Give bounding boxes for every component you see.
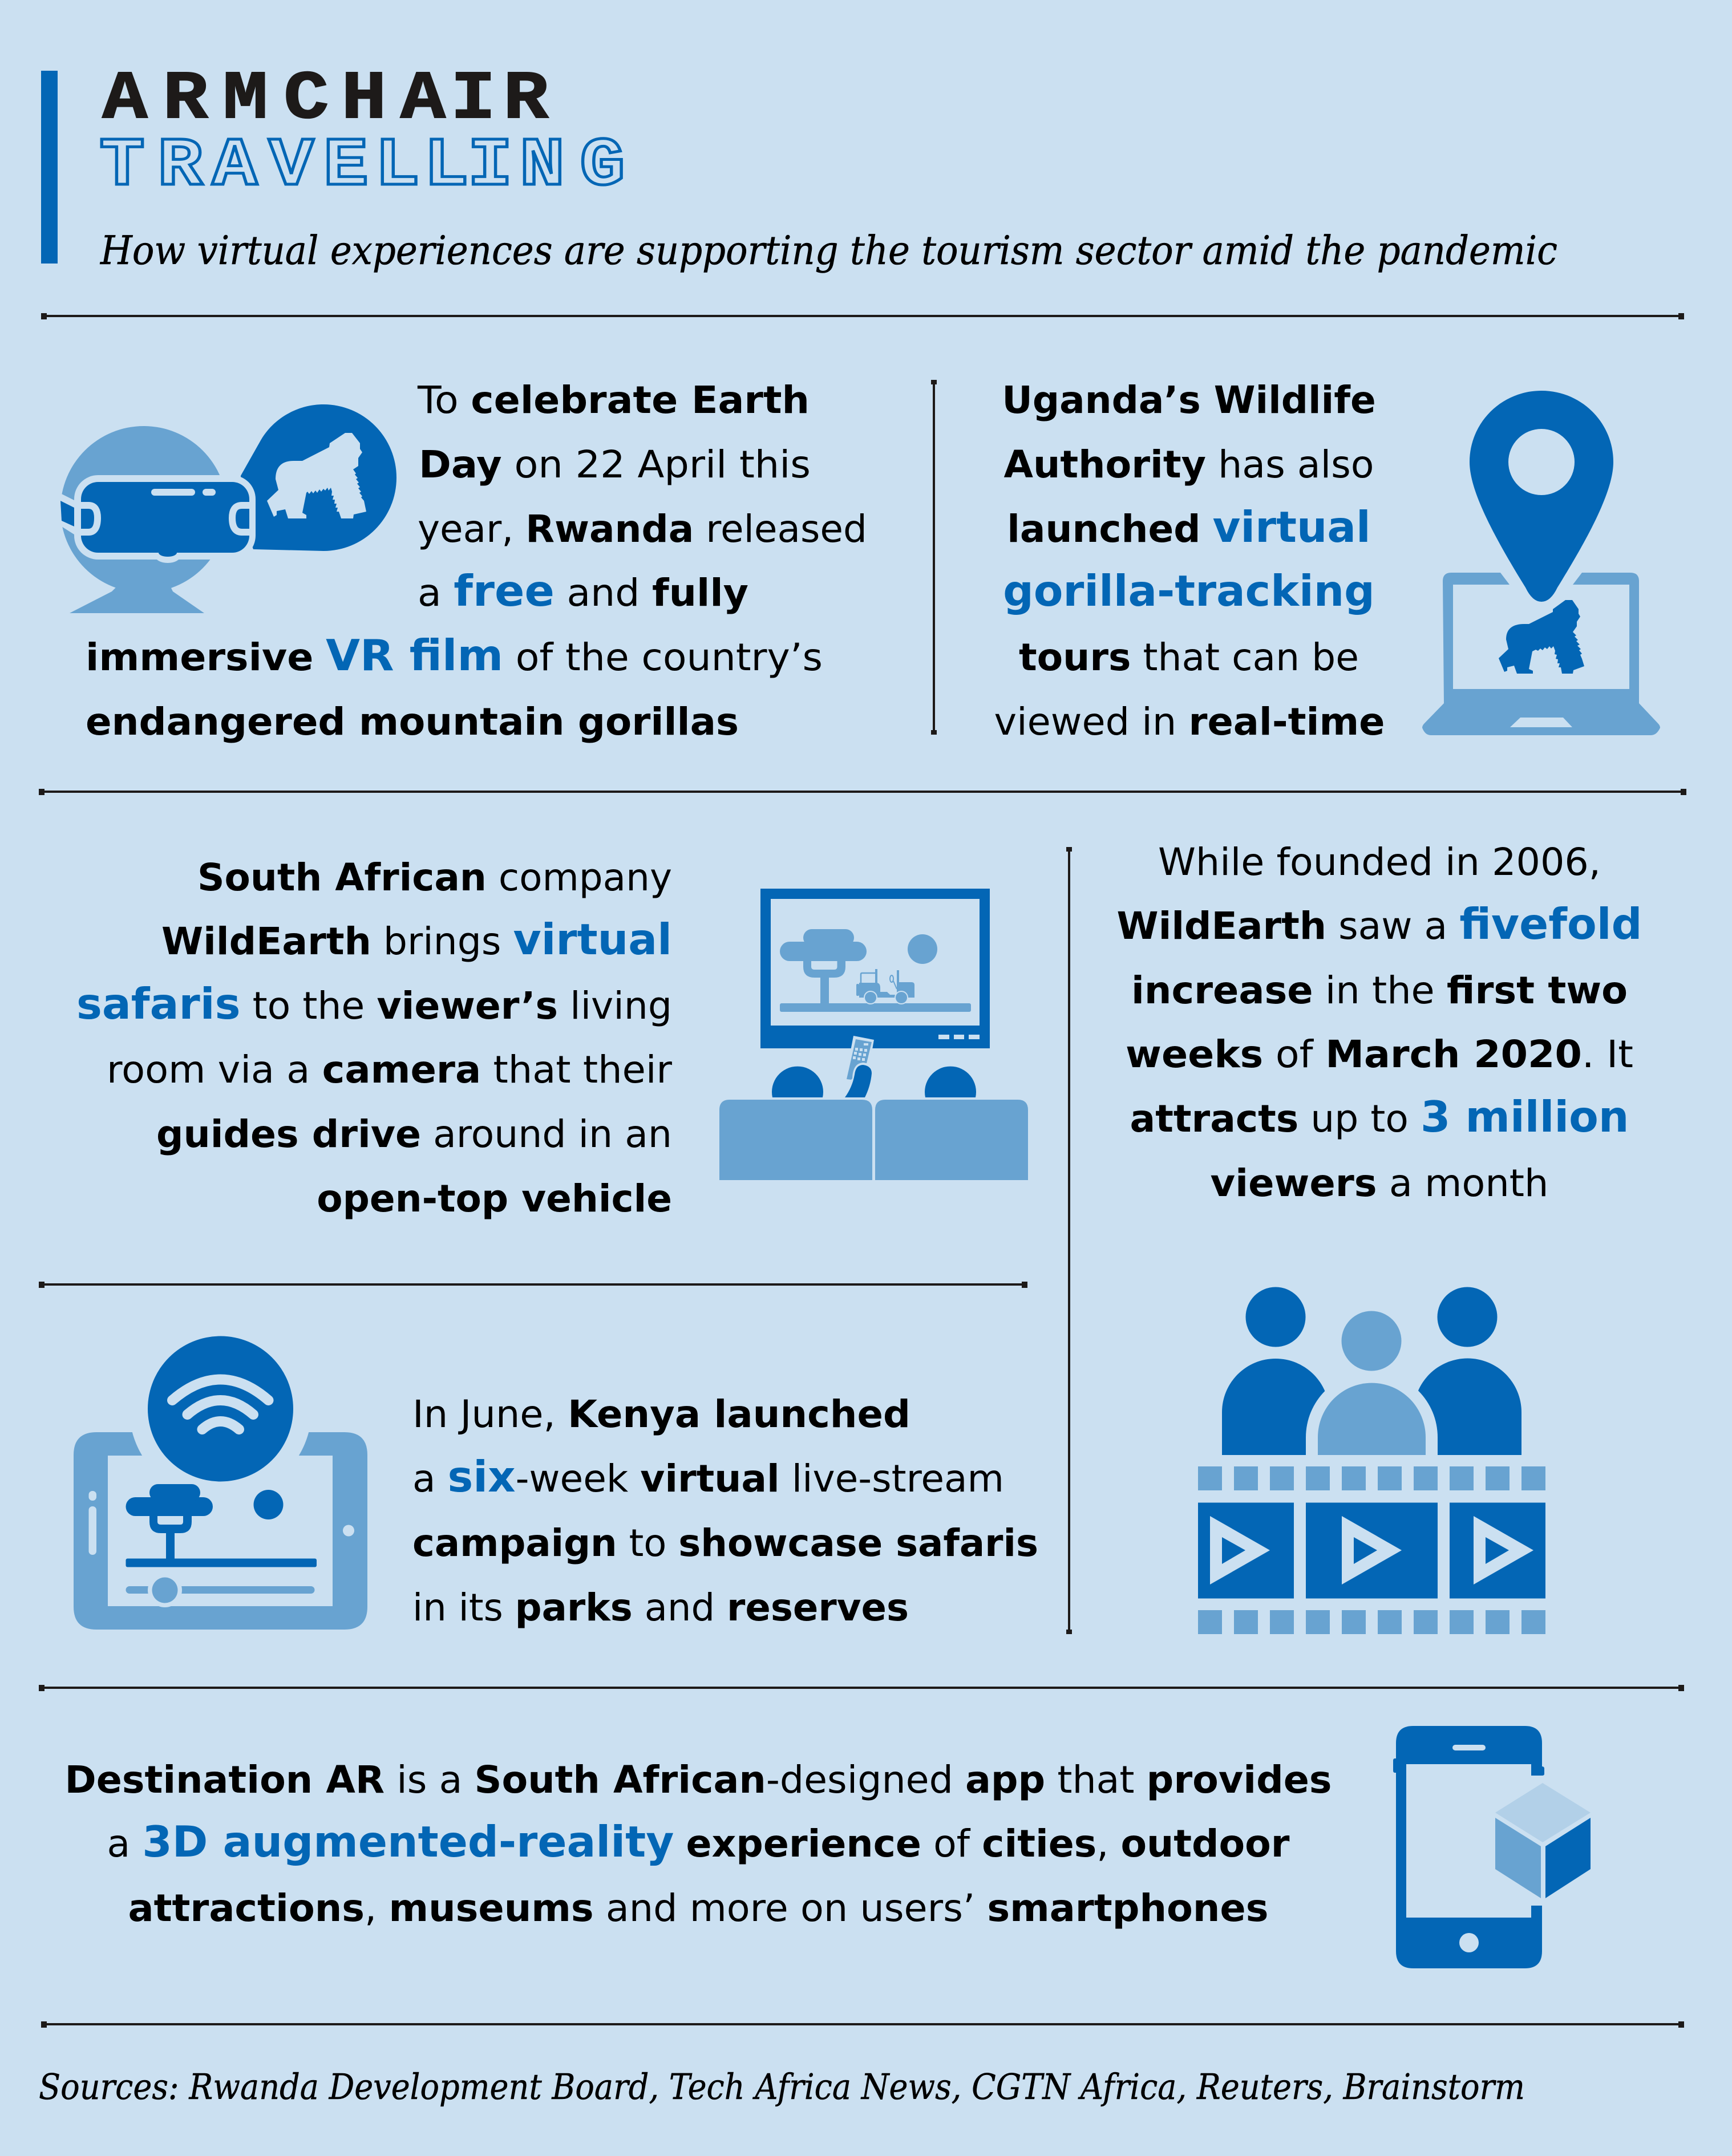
text: Rwanda VR film: a free and fully bbox=[418, 566, 748, 616]
text: WildEarth growth bbox=[1117, 840, 1642, 1205]
icon: VR headset viewer with gorilla bubble bbox=[57, 404, 396, 613]
icon: audience above film strip bbox=[1198, 1287, 1545, 1634]
title: armchair: ARMCHAIR bbox=[102, 60, 549, 138]
text: WildEarth safaris: WildEarth brings virtual bbox=[161, 914, 672, 964]
icon: map pin over laptop bbox=[1422, 391, 1660, 735]
text: Uganda tracking tours: launched virtual bbox=[1007, 502, 1371, 552]
text: Destination AR: attractions, museums and more on users’ smartphones bbox=[128, 1886, 1269, 1930]
video slider bbox=[126, 1573, 315, 1607]
text: Rwanda VR film: endangered mountain gorillas bbox=[86, 700, 739, 744]
text: WildEarth safaris: open-top vehicle bbox=[317, 1177, 672, 1221]
phone bbox=[1393, 1726, 1544, 1968]
subtitle: How virtual experiences are supporting the tourism sector amid the pandemic bbox=[99, 228, 1557, 274]
text: WildEarth growth: weeks of March 2020. It bbox=[1126, 1032, 1633, 1076]
text: Destination AR bbox=[65, 1758, 1332, 1930]
laptop bbox=[1422, 573, 1660, 735]
text: Rwanda VR film bbox=[86, 378, 867, 744]
text: Uganda tracking tours: Uganda’s Wildlife bbox=[1002, 378, 1376, 422]
text: WildEarth growth: While founded in 2006, bbox=[1158, 840, 1601, 884]
text: Uganda tracking tours: gorilla-tracking bbox=[1003, 566, 1375, 616]
text: Rwanda VR film: To celebrate Earth bbox=[417, 378, 810, 422]
text: WildEarth safaris: safaris to the viewer’s living bbox=[76, 979, 672, 1029]
text: WildEarth growth: viewers a month bbox=[1211, 1161, 1548, 1205]
text: Uganda tracking tours: viewed in real-time bbox=[994, 700, 1385, 744]
goggles bbox=[57, 475, 256, 563]
text: Uganda tracking tours: Authority has also bbox=[1004, 443, 1374, 487]
sources: Sources: Rwanda Development Board, Tech Africa News, CGTN Africa, Reuters, Brainstorm bbox=[39, 2066, 1525, 2108]
gorilla on screen bbox=[1499, 600, 1584, 674]
remote control bbox=[845, 1036, 874, 1097]
text: WildEarth growth: increase in the first two bbox=[1131, 968, 1628, 1012]
tv buttons bbox=[938, 1035, 980, 1039]
wifi badge bbox=[129, 1318, 311, 1500]
text: WildEarth safaris bbox=[76, 856, 673, 1221]
text: Kenya campaign bbox=[412, 1392, 1038, 1630]
text: Kenya campaign: in its parks and reserves bbox=[412, 1586, 909, 1630]
text: WildEarth safaris: guides drive around in an bbox=[156, 1112, 672, 1156]
text: Rwanda VR film: immersive VR film of the country’s bbox=[86, 630, 823, 680]
text: WildEarth growth: WildEarth saw a fivefold bbox=[1117, 899, 1642, 949]
icon: smartphone with AR cube bbox=[1393, 1726, 1591, 1968]
pin bbox=[1470, 391, 1613, 602]
text: Kenya campaign: campaign to showcase safaris bbox=[412, 1521, 1038, 1565]
viewer heads bbox=[772, 1067, 976, 1097]
text: Uganda tracking tours bbox=[994, 378, 1385, 744]
film strip perforations bbox=[1198, 1466, 1545, 1634]
text: Rwanda VR film: year, Rwanda released bbox=[418, 507, 867, 551]
sofas bbox=[719, 1100, 1028, 1180]
icon: viewers watching safari on TV bbox=[719, 889, 1028, 1180]
icon: tablet with wifi and safari bbox=[74, 1318, 367, 1630]
safari scene bbox=[780, 929, 971, 1012]
title block bbox=[41, 60, 1557, 274]
accent bar bbox=[41, 71, 58, 264]
text: Uganda tracking tours: tours that can be bbox=[1019, 635, 1359, 679]
text: Kenya campaign: In June, Kenya launched bbox=[412, 1392, 910, 1436]
film frames with play icons bbox=[1198, 1502, 1545, 1598]
text: Kenya campaign: a six-week virtual live-stream bbox=[412, 1452, 1004, 1502]
text: WildEarth growth: attracts up to 3 million bbox=[1130, 1092, 1629, 1142]
text: WildEarth safaris: room via a camera that their bbox=[107, 1048, 673, 1092]
head bbox=[60, 426, 227, 613]
television bbox=[760, 889, 990, 1048]
people bbox=[1222, 1287, 1521, 1457]
text: Rwanda VR film: Day on 22 April this bbox=[419, 443, 811, 487]
cube bbox=[1495, 1783, 1591, 1898]
tablet buttons bbox=[89, 1491, 354, 1555]
tablet screen scene bbox=[126, 1484, 317, 1567]
title: travelling: TRAVELLING bbox=[99, 127, 625, 205]
tablet bbox=[74, 1432, 367, 1630]
thought bubble bbox=[240, 404, 396, 551]
jeep bbox=[856, 969, 914, 1004]
text: WildEarth safaris: South African company bbox=[197, 856, 672, 899]
text: Destination AR: Destination AR is a South African-designed app that provides bbox=[65, 1758, 1332, 1802]
text: Destination AR: a 3D augmented-reality experience of cities, outdoor bbox=[107, 1817, 1290, 1867]
gorilla in bubble bbox=[267, 433, 366, 518]
